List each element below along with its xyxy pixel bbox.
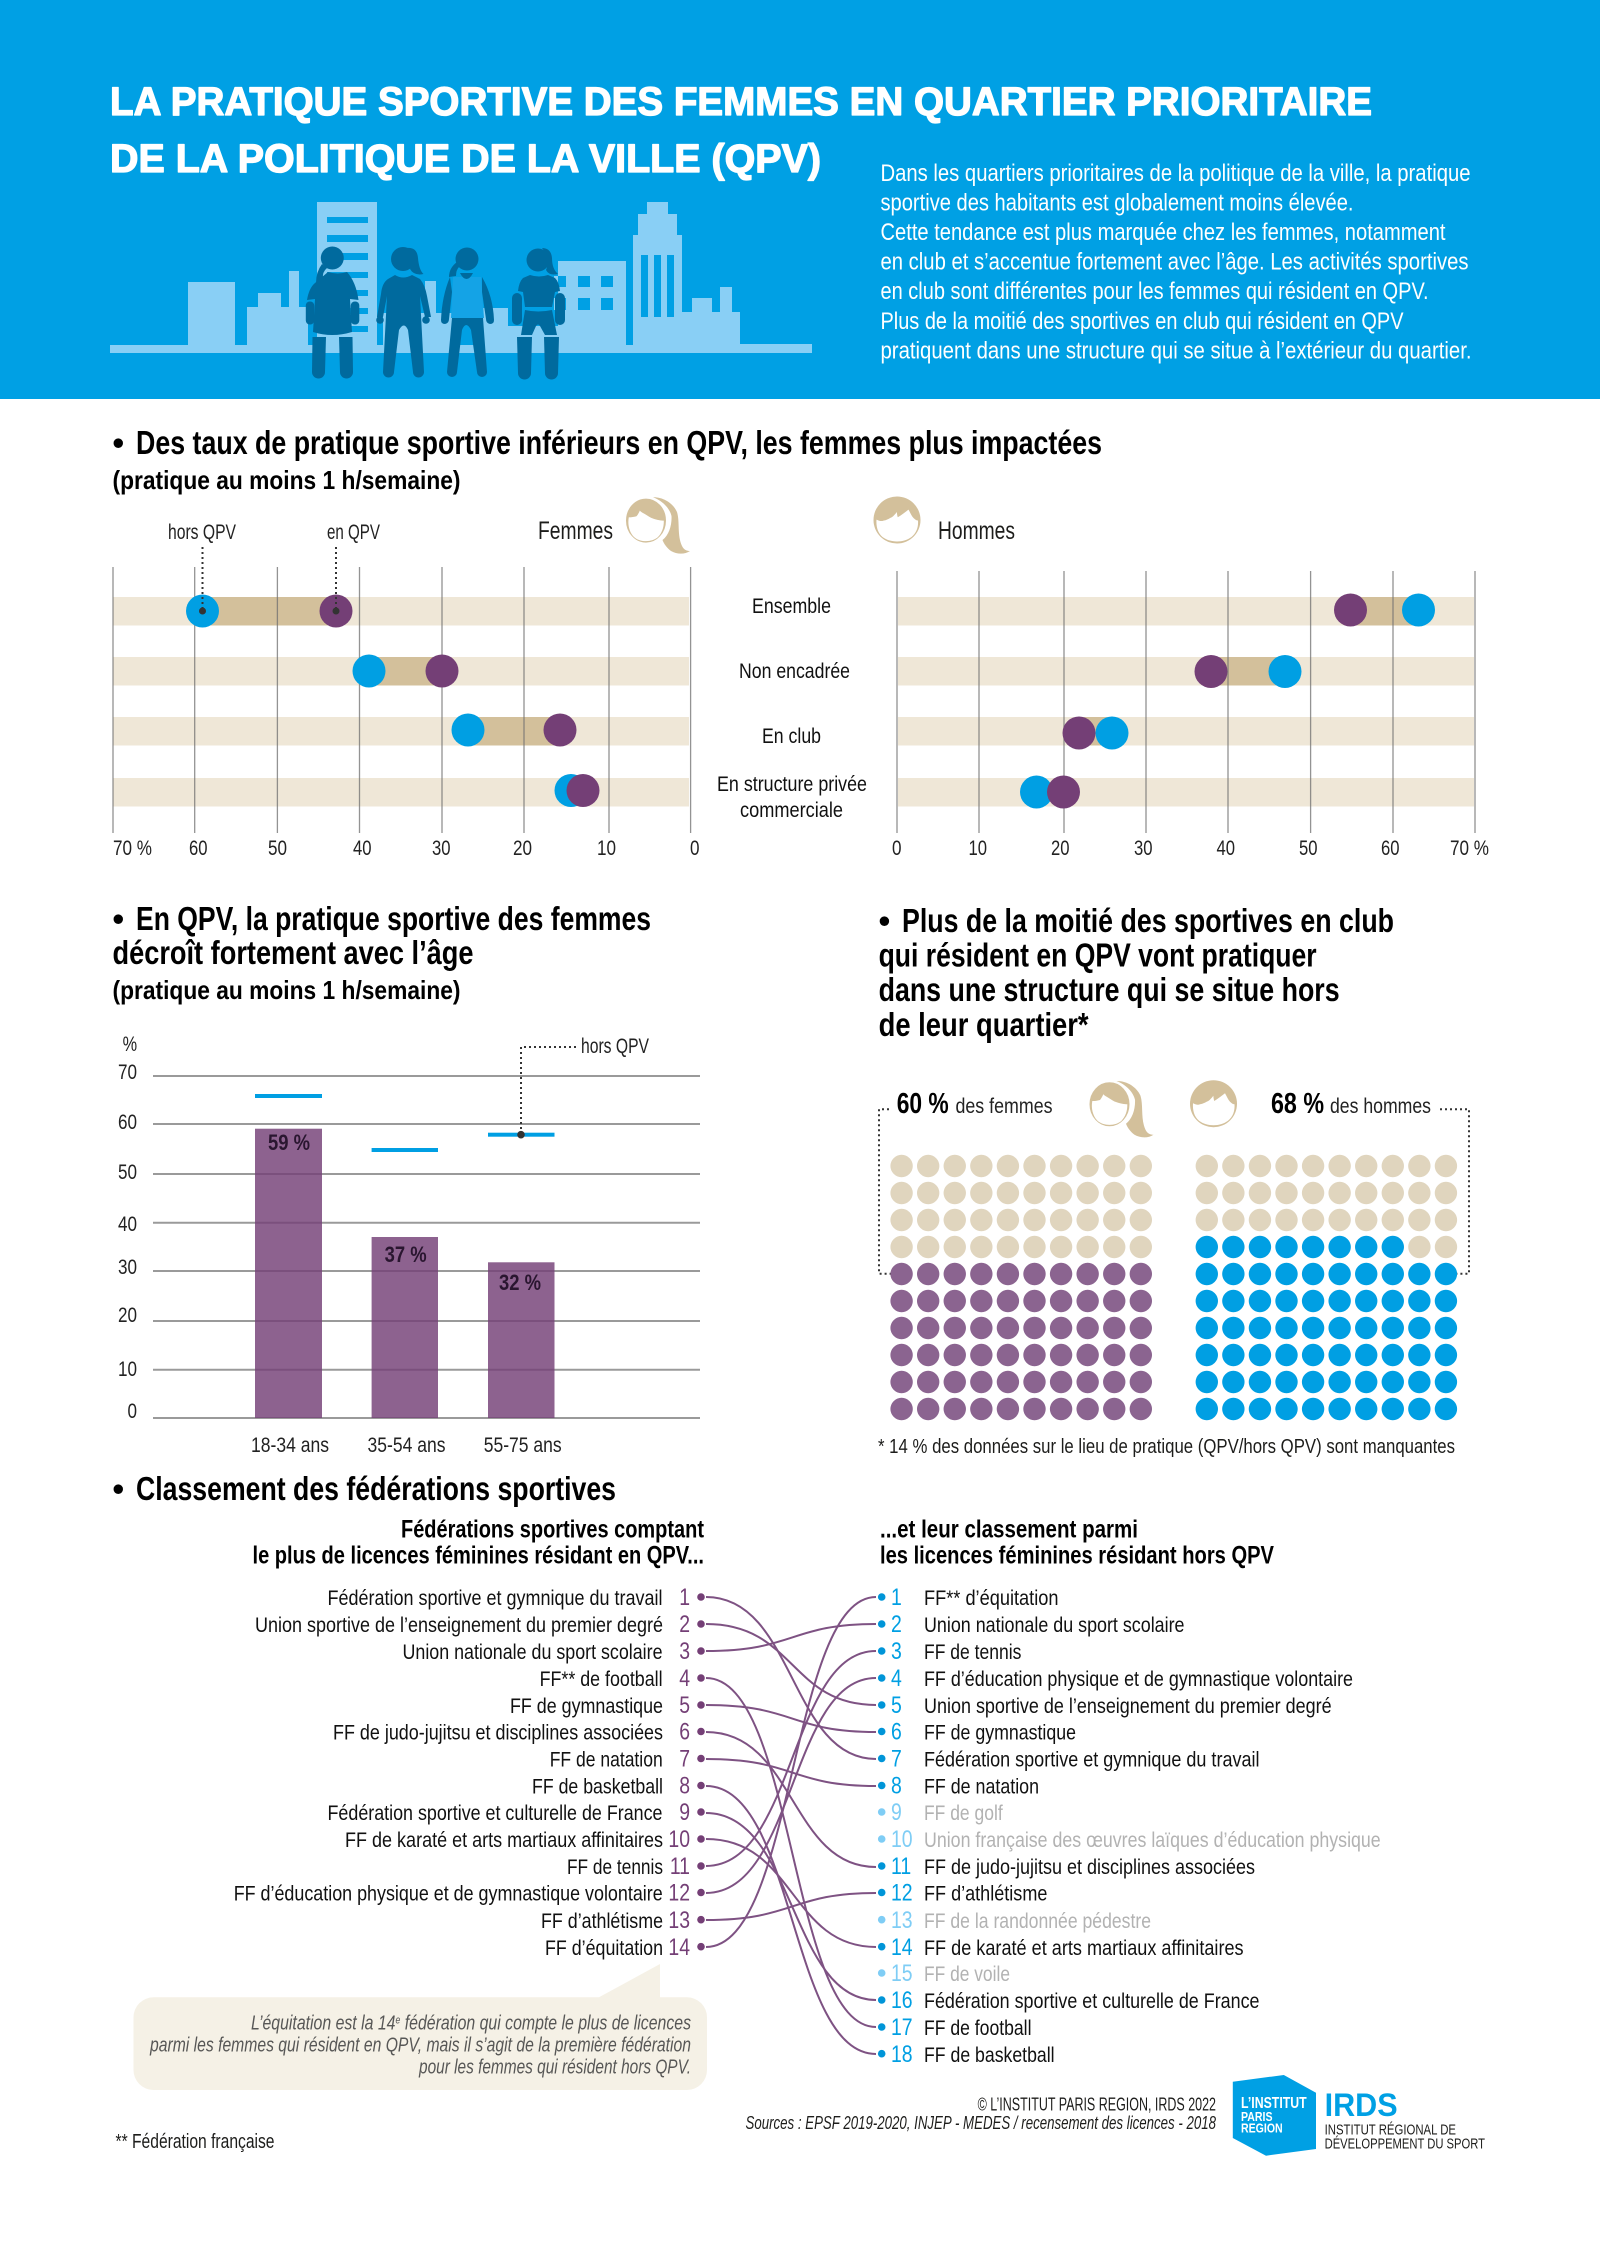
heading: structure hors quartier: Plus de la moitié des sportives en club (902, 902, 1394, 939)
intro paragraph: en club et s’accentue fortement avec l’âge. Les activités sportives (880, 249, 1468, 276)
hors QPV leader (517, 1035, 649, 1138)
category labels: Non encadrée (739, 659, 850, 683)
heading: décroît avec l'âge: En QPV, la pratique sportive des femmes (136, 900, 651, 937)
axis hommes: 20 (1051, 837, 1070, 860)
waffle legend: femmes: 60 % (897, 1088, 949, 1120)
bar values (268, 1130, 541, 1295)
ranking: right list (891, 1583, 1381, 2067)
ranking: right list: Fédération sportive et culturelle de France (924, 1989, 1260, 2013)
axis hommes: 10 (968, 837, 987, 860)
left rank numbers: 9 (679, 1798, 690, 1825)
callout: équitation: pour les femmes qui résident hors QPV. (418, 2056, 691, 2078)
footnote: fédération française: ** Fédération française (116, 2131, 274, 2153)
ranking: left list: FF de judo-jujitsu et disciplines associées (333, 1720, 663, 1744)
axis femmes: 50 (268, 837, 287, 860)
left rank numbers: 14 (668, 1933, 690, 1960)
heading: taux de pratique: • (112, 424, 124, 461)
logo: IRDS: DÉVELOPPEMENT DU SPORT (1325, 2136, 1485, 2153)
bar values: 32 % (499, 1270, 541, 1295)
right rank numbers: 8 (891, 1772, 902, 1799)
callout: équitation: L’équitation est la 14 (251, 2012, 433, 2034)
column heading: right: ...et leur classement parmi (880, 1516, 1138, 1544)
right rank numbers: 3 (891, 1637, 902, 1664)
left rank numbers: 1 (679, 1583, 690, 1610)
right rank numbers: 10 (891, 1825, 913, 1852)
axis hommes: 0 (892, 837, 902, 860)
ranking: right list: FF de judo-jujitsu et disciplines associées (924, 1855, 1255, 1879)
waffle: hommes (1207, 1166, 1447, 1409)
chart: femmes: Femmes (538, 517, 613, 545)
credits: Sources : EPSF 2019-2020, INJEP - MEDES / recensement des licences - 2018 (746, 2112, 1217, 2133)
logo: L'Institut Paris Region: REGION (1241, 2120, 1283, 2135)
woman in long sleeves (376, 247, 431, 378)
right rank numbers: 18 (891, 2040, 913, 2067)
icon: homme (1190, 1080, 1237, 1127)
icon: four women standing (306, 246, 565, 380)
intro paragraph: pratiquent dans une structure qui se situe à l’extérieur du quartier. (880, 337, 1472, 364)
y axis labels: % (123, 1033, 137, 1056)
waffle legend: hommes: 68 % (1271, 1088, 1324, 1120)
bar chart: pratique par âge (118, 1033, 700, 1457)
axis femmes: 60 (189, 837, 208, 860)
icon: femme (1089, 1081, 1154, 1137)
age labels: 18-34 ans (251, 1434, 329, 1457)
ranking: left list: FF de karaté et arts martiaux affinitaires (345, 1828, 663, 1852)
left rank numbers: 8 (679, 1772, 690, 1799)
legend labels: hors QPV (168, 521, 236, 544)
left rank numbers: 2 (679, 1610, 690, 1637)
waffle legend: femmes (879, 1088, 1052, 1274)
heading: taux de pratique: (pratique au moins 1 h/semaine) (112, 465, 460, 495)
ranking: left list: Fédération sportive et culturelle de France (328, 1801, 662, 1825)
ranking: left list: FF d’équitation (545, 1936, 663, 1960)
heading: classement: • (112, 1470, 124, 1507)
dots hommes (1020, 594, 1435, 808)
right rank numbers: 16 (891, 1986, 913, 2013)
heading: structure hors quartier: • (879, 902, 890, 939)
y axis labels: 50 (118, 1161, 137, 1184)
ranking: right list: Union sportive de l’enseignement du premier degré (924, 1694, 1332, 1718)
left rank numbers: 3 (679, 1637, 690, 1664)
bar values: 59 % (268, 1130, 310, 1155)
column heading: left: Fédérations sportives comptant (401, 1516, 705, 1544)
left rank numbers: 13 (668, 1906, 690, 1933)
hors QPV leader: hors QPV (581, 1035, 649, 1058)
axis hommes: 50 (1299, 837, 1318, 860)
chart: hommes (892, 517, 1489, 860)
ranking: left list: FF** de football (540, 1667, 663, 1691)
intro paragraph: Dans les quartiers prioritaires de la politique de la ville, la pratique (880, 160, 1470, 187)
ranking: right list: FF de basketball (924, 2043, 1055, 2067)
axis hommes: 70 % (1450, 837, 1489, 860)
waffle legend: femmes: des femmes (956, 1095, 1052, 1118)
right rank numbers: 13 (891, 1906, 913, 1933)
ranking: right list: FF de tennis (924, 1640, 1021, 1664)
ranking: right list: Union française des œuvres laïques d’éducation physique (924, 1828, 1381, 1852)
left rank numbers: 6 (679, 1718, 690, 1745)
intro paragraph: en club sont différentes pour les femmes qui résident en QPV. (880, 278, 1428, 305)
title: DE LA POLITIQUE DE LA VILLE (QPV) (110, 137, 821, 181)
y axis labels: 70 (118, 1061, 137, 1084)
y axis labels (118, 1033, 137, 1423)
left rank numbers: 4 (679, 1664, 690, 1691)
y axis labels: 20 (118, 1304, 137, 1327)
axis femmes (113, 837, 700, 860)
heading: taux de pratique: Des taux de pratique sportive inférieurs en QPV, les femmes plus impactées (136, 424, 1102, 461)
ranking: right list: FF de golf (924, 1801, 1003, 1825)
waffle: femmes (902, 1166, 1142, 1409)
bars (255, 1129, 554, 1418)
waffle legend: hommes (1271, 1088, 1469, 1274)
age labels (251, 1434, 562, 1457)
heading: structure hors quartier: dans une structure qui se situe hors (879, 971, 1340, 1008)
y axis labels: 0 (128, 1400, 137, 1423)
ranking: left list: FF de tennis (567, 1855, 663, 1879)
header band (0, 0, 1600, 399)
age labels: 35-54 ans (368, 1434, 446, 1457)
axis femmes: 70 % (113, 837, 152, 860)
heading: classement: Classement des fédérations sportives (136, 1470, 616, 1507)
category labels: En club (762, 724, 821, 748)
heading: décroît avec l'âge: (pratique au moins 1 h/semaine) (112, 975, 460, 1005)
category labels: commerciale (740, 798, 843, 822)
category labels: Ensemble (752, 594, 831, 618)
icon: homme (874, 496, 920, 544)
footnote: données manquantes: * 14 % des données sur le lieu de pratique (QPV/hors QPV) sont manquantes (878, 1435, 1455, 1458)
left rank numbers: 5 (679, 1691, 690, 1718)
ranking: left list: FF de basketball (532, 1774, 663, 1798)
ranking: right list: Union nationale du sport scolaire (924, 1613, 1184, 1637)
background bands (898, 597, 1474, 806)
axis hommes: 60 (1381, 837, 1400, 860)
ranking: right list: FF de gymnastique (924, 1720, 1076, 1744)
axis femmes: 20 (513, 837, 532, 860)
ranking: left list: FF de natation (550, 1748, 663, 1772)
background bands (113, 597, 689, 806)
ranking: left list (234, 1583, 690, 1960)
right rank numbers: 4 (891, 1664, 902, 1691)
title: LA PRATIQUE SPORTIVE DES FEMMES EN QUARTIER PRIORITAIRE (110, 80, 1372, 124)
credits: © L’INSTITUT PARIS REGION, IRDS 2022 (978, 2094, 1216, 2115)
logo: IRDS (1325, 2087, 1485, 2153)
ranking: right list: FF d’athlétisme (924, 1882, 1047, 1906)
left rank numbers: 12 (668, 1879, 690, 1906)
ranking: right list: FF de karaté et arts martiaux affinitaires (924, 1936, 1244, 1960)
right rank numbers: 15 (891, 1959, 913, 1986)
right rank numbers: 11 (891, 1852, 911, 1879)
callout: équitation (134, 1964, 707, 2090)
hors QPV markers (255, 1094, 554, 1152)
intro paragraph (880, 160, 1472, 364)
heading: structure hors quartier: de leur quartier* (879, 1006, 1089, 1043)
waffle legend: hommes: des hommes (1330, 1095, 1431, 1118)
heading: taux de pratique (112, 424, 1102, 495)
axis femmes: 30 (432, 837, 450, 860)
title (110, 80, 1372, 181)
difference bands (202, 597, 560, 746)
intro paragraph: Plus de la moitié des sportives en club qui résident en QPV (880, 308, 1404, 335)
heading: décroît avec l'âge (112, 900, 651, 1005)
category labels: En structure privée (717, 772, 867, 796)
ranking: left list: Fédération sportive et gymnique du travail (328, 1586, 662, 1610)
logo: L'Institut Paris Region (1233, 2075, 1316, 2156)
left rank numbers: 10 (668, 1825, 690, 1852)
ranking: left dots (697, 1593, 705, 1950)
right rank numbers: 5 (891, 1691, 902, 1718)
icon: femme (626, 497, 690, 554)
woman in tank top (441, 248, 494, 377)
right rank numbers: 7 (891, 1745, 902, 1772)
intro paragraph: Cette tendance est plus marquée chez les femmes, notamment (880, 219, 1446, 246)
ranking: left list: FF d’athlétisme (541, 1909, 663, 1933)
heading: structure hors quartier (879, 902, 1394, 1043)
woman in t-shirt (306, 246, 359, 378)
right rank numbers: 1 (891, 1583, 902, 1610)
y axis labels: 40 (118, 1213, 137, 1236)
ranking: right list: FF de la randonnée pédestre (924, 1909, 1151, 1933)
intro paragraph: sportive des habitants est globalement moins élevée. (880, 190, 1354, 216)
y axis labels: 10 (118, 1358, 137, 1381)
right rank numbers: 9 (891, 1798, 902, 1825)
logo: L'Institut Paris Region: PARIS (1241, 2109, 1273, 2124)
axis femmes: 10 (597, 837, 616, 860)
category labels (717, 594, 867, 822)
axis hommes (892, 837, 1489, 860)
axis hommes: 30 (1134, 837, 1152, 860)
left rank numbers (668, 1583, 690, 1960)
callout: équitation: e (395, 2014, 400, 2026)
axis femmes: 40 (353, 837, 372, 860)
ranking: right list: FF de football (924, 2016, 1032, 2040)
ranking: right list: FF** d’équitation (924, 1586, 1058, 1610)
logo: IRDS: IRDS (1325, 2087, 1398, 2123)
bar values: 37 % (385, 1242, 427, 1267)
ranking: right list: FF de natation (924, 1774, 1039, 1798)
logo: L'Institut Paris Region: L’INSTITUT (1241, 2095, 1307, 2112)
right rank numbers (891, 1583, 913, 2067)
axis hommes: 40 (1216, 837, 1235, 860)
left rank numbers: 11 (670, 1852, 690, 1879)
right rank numbers: 6 (891, 1718, 902, 1745)
ranking: left list: FF d’éducation physique et de gymnastique volontaire (234, 1882, 663, 1906)
ranking: right dots (878, 1593, 886, 2058)
leaders (202, 547, 336, 611)
right rank numbers: 2 (891, 1610, 902, 1637)
ranking: right list: FF de voile (924, 1962, 1010, 1986)
ranking: left list: Union sportive de l’enseignement du premier degré (255, 1613, 663, 1637)
callout: équitation: parmi les femmes qui résident en QPV, mais il s’agit de la première fédération (149, 2035, 691, 2057)
y axis labels: 30 (118, 1256, 137, 1279)
ranking: left list: Union nationale du sport scolaire (402, 1640, 662, 1664)
y axis labels: 60 (118, 1111, 137, 1134)
ranking: right list: Fédération sportive et gymnique du travail (924, 1748, 1260, 1772)
callout: équitation: fédération qui compte le plus de licences (400, 2012, 691, 2034)
column heading: left (252, 1516, 705, 1570)
icon: city skyline (110, 202, 812, 353)
chart: hommes: Hommes (938, 517, 1015, 545)
heading: décroît avec l'âge: • (112, 900, 124, 937)
axis femmes: 0 (690, 837, 700, 860)
column heading: right (880, 1516, 1274, 1570)
ranking: connector curves (706, 1597, 876, 2054)
column heading: left: le plus de licences féminines résidant en QPV... (252, 1542, 704, 1570)
woman in shorts (512, 248, 565, 380)
right rank numbers: 12 (891, 1879, 913, 1906)
logo: IRDS: INSTITUT RÉGIONAL DE (1325, 2122, 1456, 2139)
credits (746, 2094, 1217, 2133)
left rank numbers: 7 (679, 1745, 690, 1772)
age labels: 55-75 ans (484, 1434, 562, 1457)
heading: décroît avec l'âge: décroît fortement avec l’âge (112, 934, 474, 971)
right rank numbers: 14 (891, 1933, 913, 1960)
ranking: left list: FF de gymnastique (510, 1694, 663, 1718)
chart: femmes: en QPV (327, 521, 380, 544)
dots femmes (186, 594, 600, 807)
ranking: right list: FF d’éducation physique et de gymnastique volontaire (924, 1667, 1353, 1691)
difference bands (1079, 597, 1419, 746)
chart: femmes (113, 517, 700, 860)
right rank numbers: 17 (891, 2013, 913, 2040)
column heading: right: les licences féminines résidant hors QPV (880, 1542, 1274, 1570)
heading: structure hors quartier: qui résident en QPV vont pratiquer (879, 936, 1317, 974)
